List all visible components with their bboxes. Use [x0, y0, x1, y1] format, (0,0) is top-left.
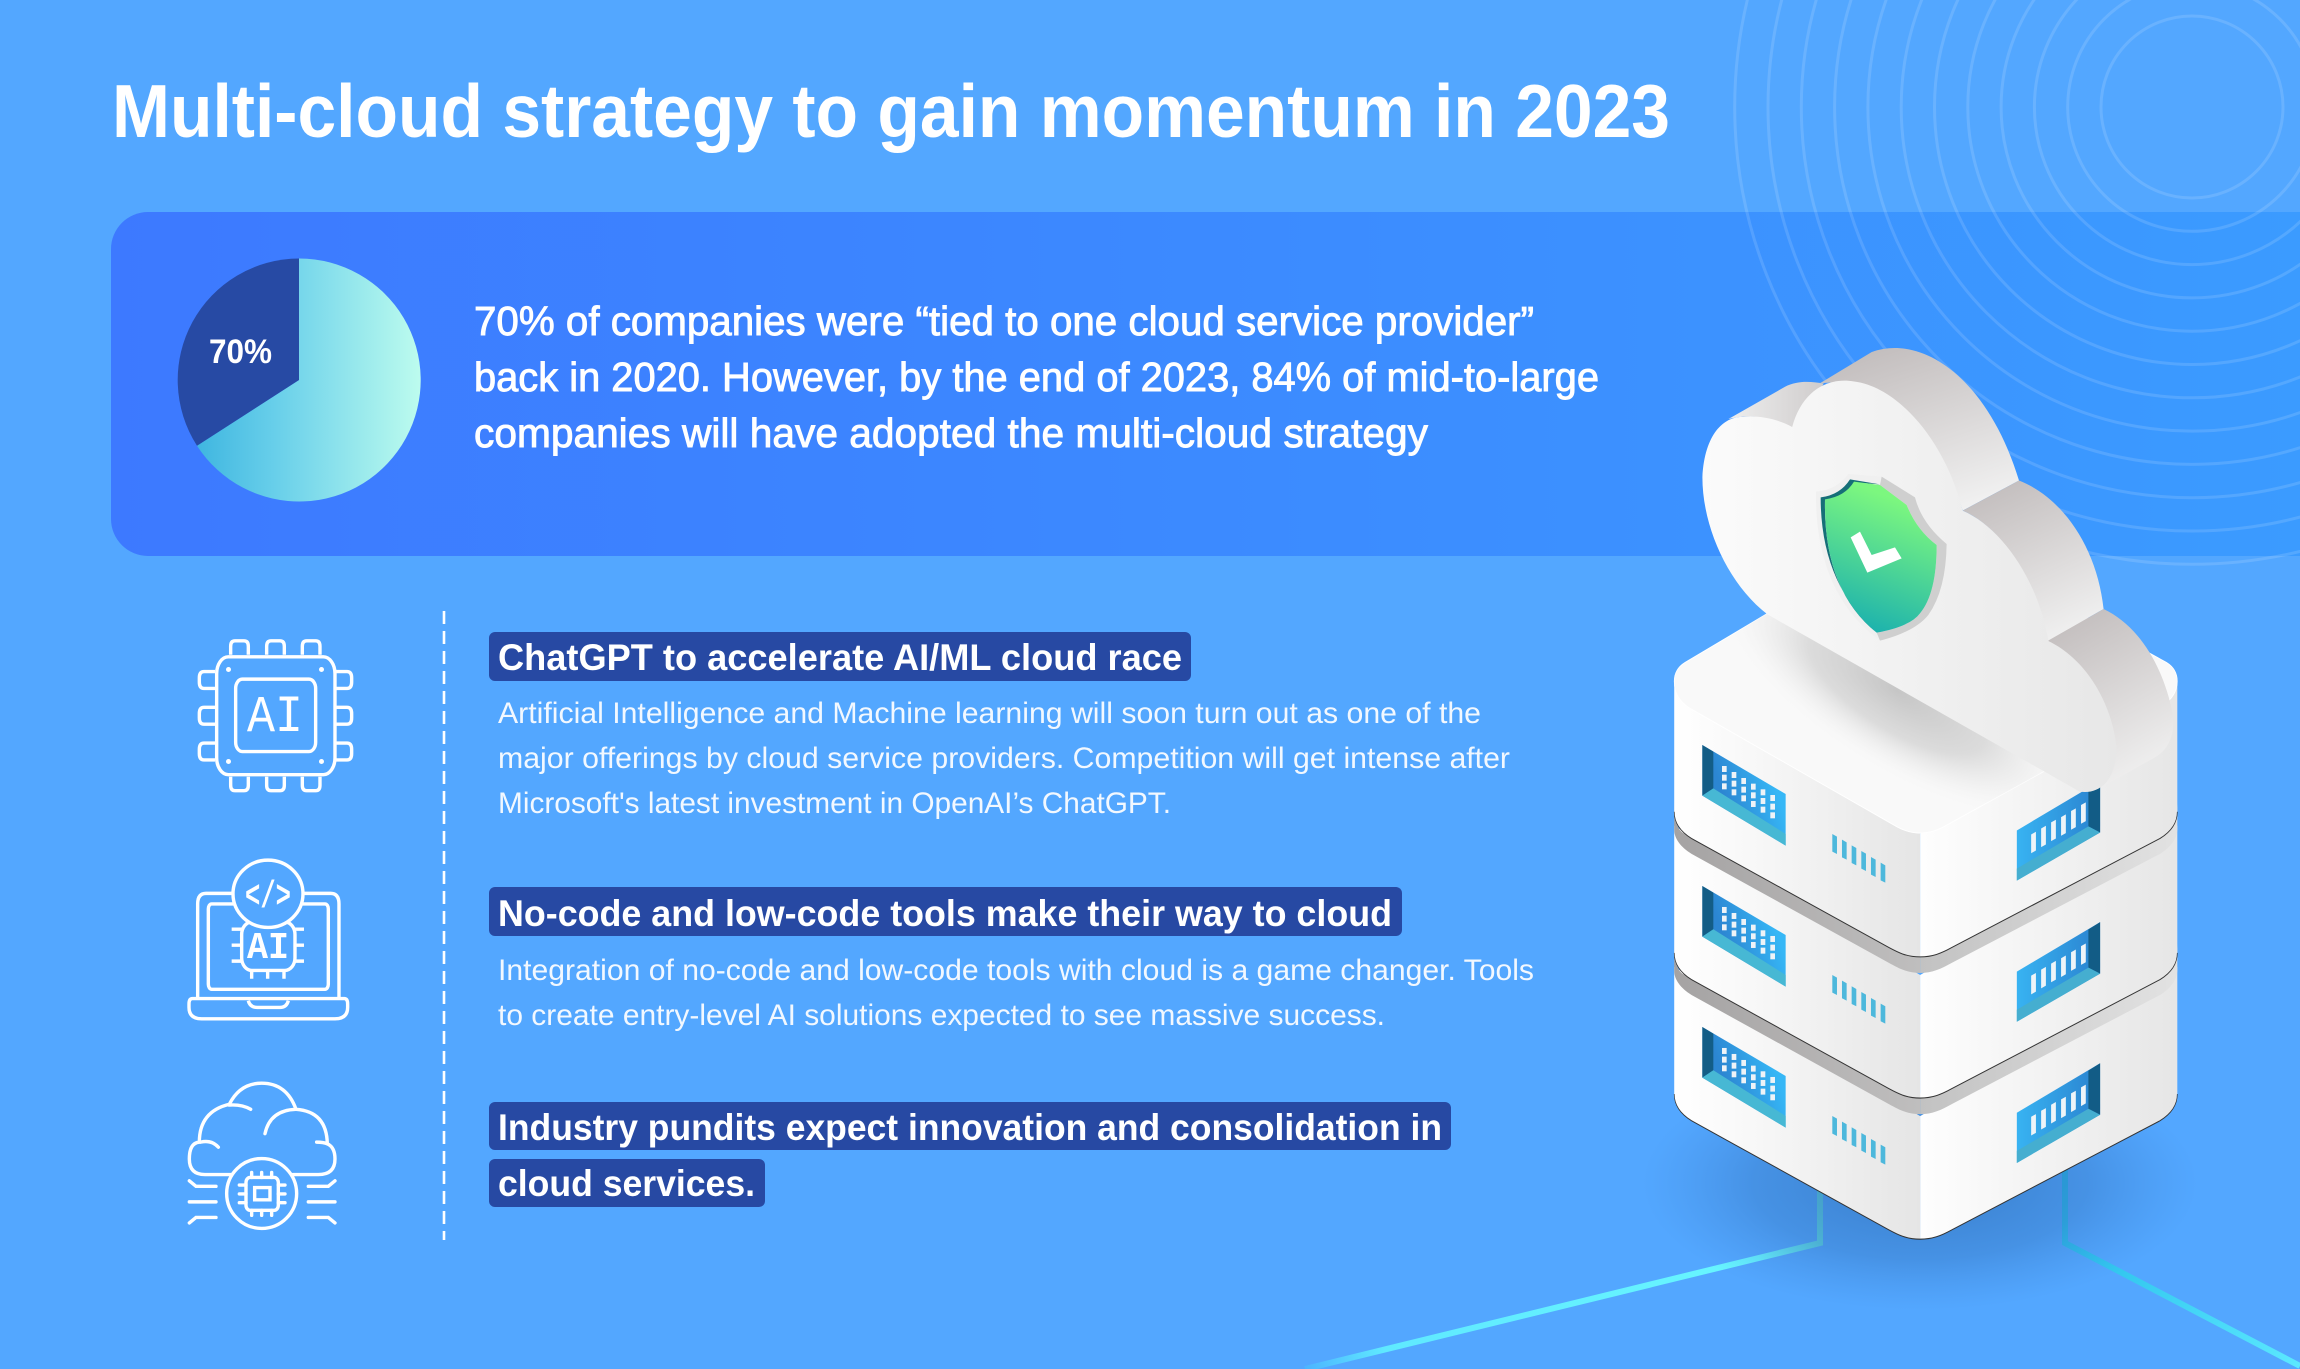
connector line right — [2065, 1163, 2300, 1366]
statistic text block: companies will have adopted the multi-cloud strategy — [474, 410, 1428, 456]
panel: statistic banner — [111, 212, 2300, 556]
item 3: industry pundits — [489, 1102, 1451, 1207]
statistic text block: back in 2020. However, by the end of 2023, 84% of mid-to-large — [474, 354, 1599, 400]
connector line left — [1305, 1185, 1820, 1369]
pie chart: 70% — [178, 258, 421, 501]
statistic text block — [474, 298, 1599, 456]
item 2: no-code tools — [489, 887, 1534, 1032]
icon: AI chip: AI — [247, 688, 303, 747]
item 1: ChatGPT: Artificial Intelligence and Machine learning will soon turn out as one of the — [498, 697, 1481, 730]
icon: laptop with AI code — [189, 860, 348, 1019]
item 1: ChatGPT: major offerings by cloud service providers. Competition will get intense after — [498, 742, 1510, 775]
icon: laptop with AI code: </> — [245, 876, 291, 919]
item 3: industry pundits: cloud services. — [498, 1163, 755, 1204]
pie chart: 70%: 70% — [209, 333, 272, 371]
icon: cloud with chip — [189, 1083, 335, 1228]
item 1: ChatGPT: Microsoft's latest investment in OpenAI’s ChatGPT. — [498, 787, 1171, 820]
title: Multi-cloud strategy to gain momentum in 2023 — [112, 69, 1670, 153]
cloud — [1702, 348, 2173, 792]
icon: shield with check — [1816, 474, 1947, 641]
server stack — [1674, 614, 2178, 1240]
item 2: no-code tools: No-code and low-code tools make their way to cloud — [498, 893, 1392, 934]
server top face — [1674, 529, 2177, 833]
item 1: ChatGPT — [489, 632, 1510, 820]
dashed divider — [443, 611, 445, 1240]
item 2: no-code tools: to create entry-level AI solutions expected to see massive success. — [498, 999, 1385, 1032]
statistic text block: 70% of companies were “tied to one cloud service provider” — [474, 298, 1534, 344]
concentric rings decoration — [1735, 0, 2300, 564]
server shadow — [1643, 1056, 2198, 1310]
icon: AI chip — [199, 641, 352, 791]
icon: laptop with AI code: AI — [247, 927, 289, 970]
item 1: ChatGPT: ChatGPT to accelerate AI/ML cloud race — [498, 637, 1182, 678]
item 3: industry pundits: Industry pundits expect innovation and consolidation in — [498, 1107, 1442, 1148]
item 2: no-code tools: Integration of no-code and low-code tools with cloud is a game changer. Tools — [498, 954, 1534, 987]
